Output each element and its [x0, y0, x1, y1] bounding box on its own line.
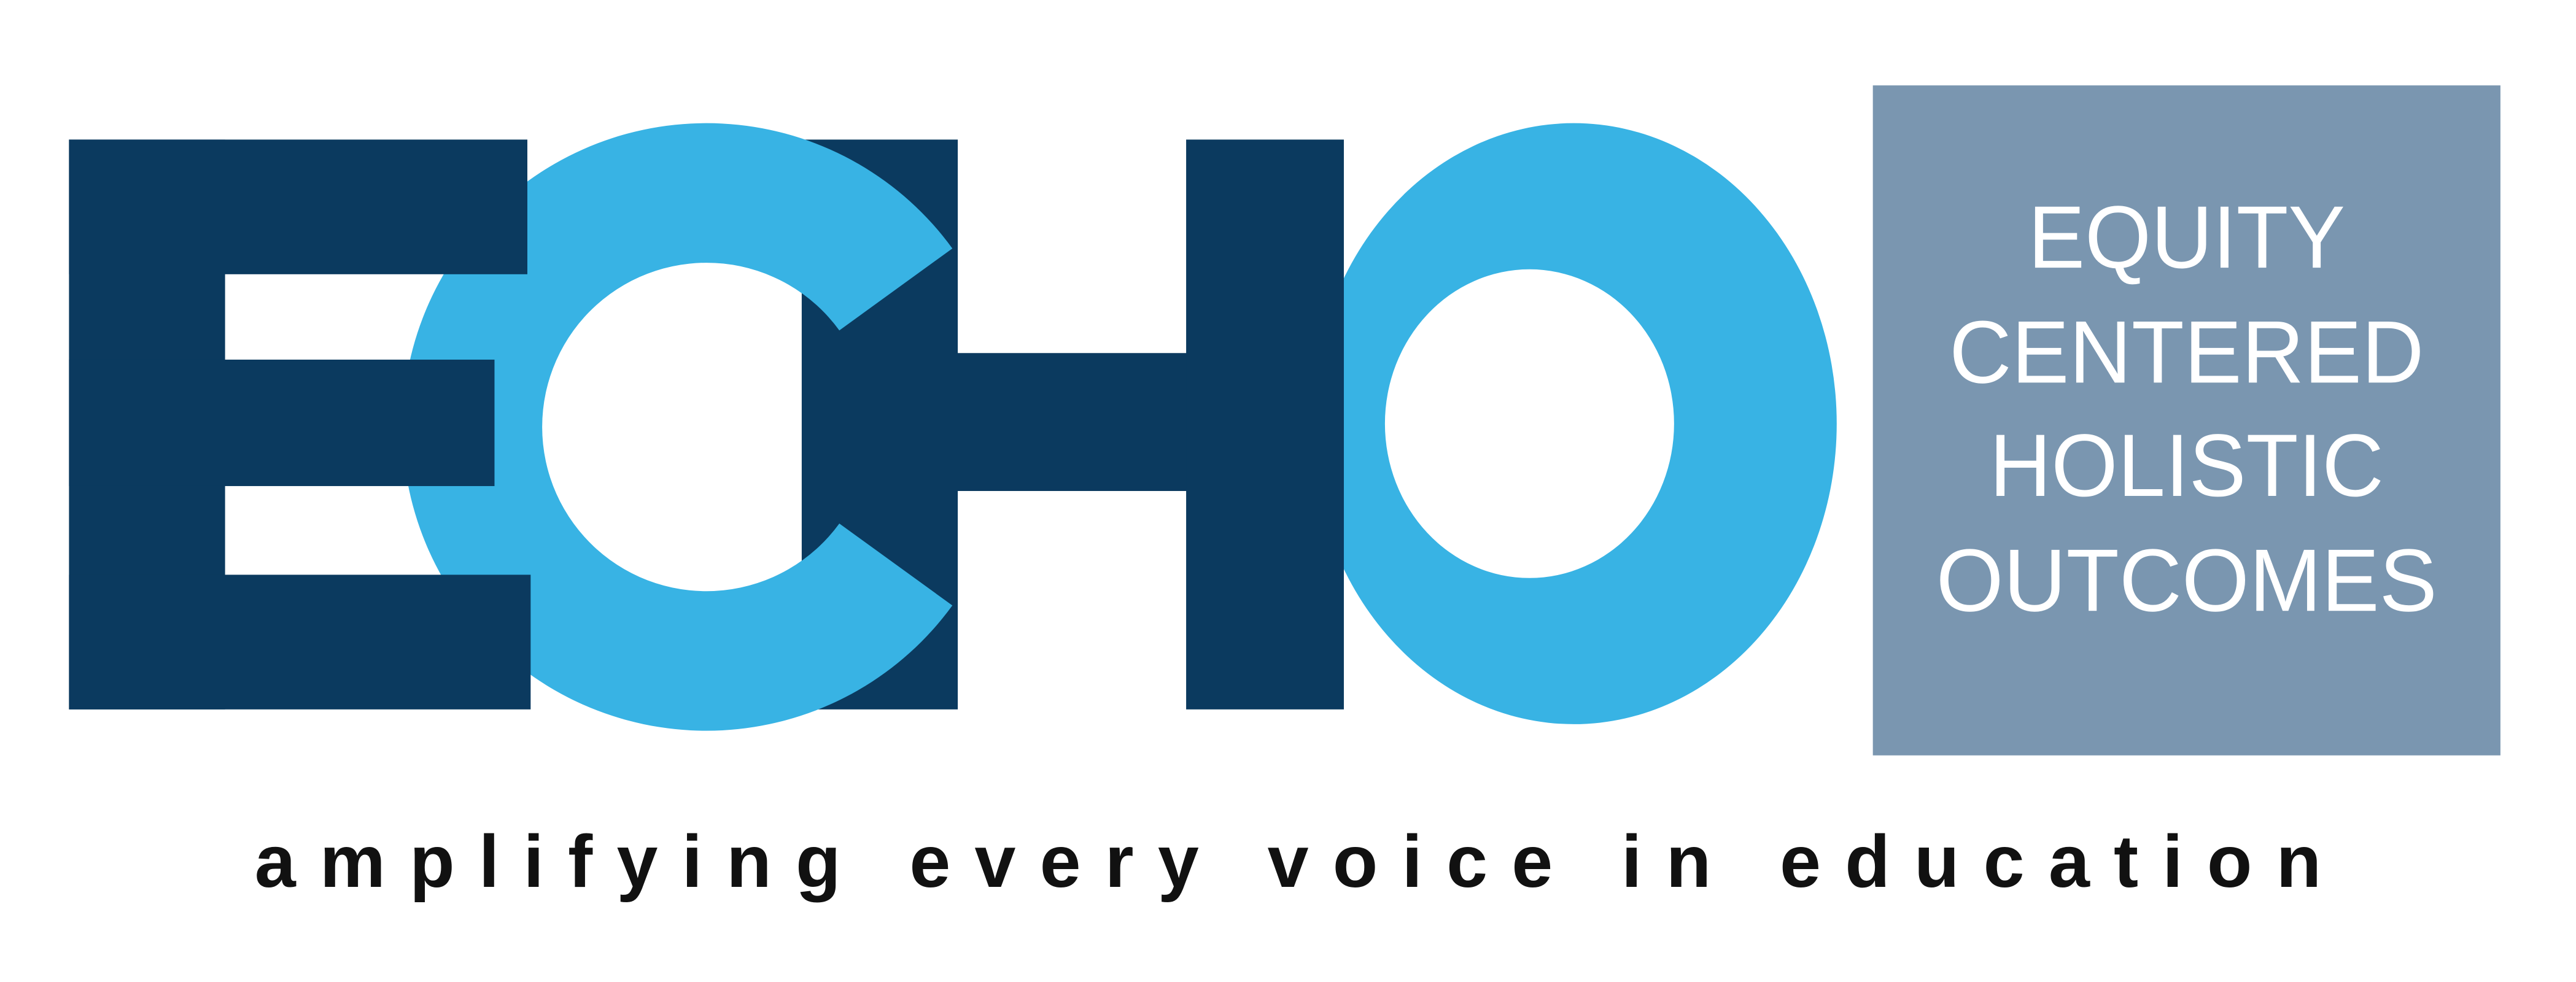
letter C [403, 123, 952, 731]
letter H [802, 139, 1344, 709]
letter O [1311, 123, 1837, 724]
acronym text: HOLISTIC [1990, 416, 2384, 515]
tagline: amplifying every voice in education [255, 820, 2321, 903]
letter E [69, 139, 530, 709]
acronym text: CENTERED [1949, 302, 2424, 401]
acronym text [1936, 187, 2437, 630]
acronym text: EQUITY [2028, 187, 2345, 287]
acronym text: OUTCOMES [1936, 530, 2437, 630]
panel: acronym box [1873, 85, 2500, 756]
